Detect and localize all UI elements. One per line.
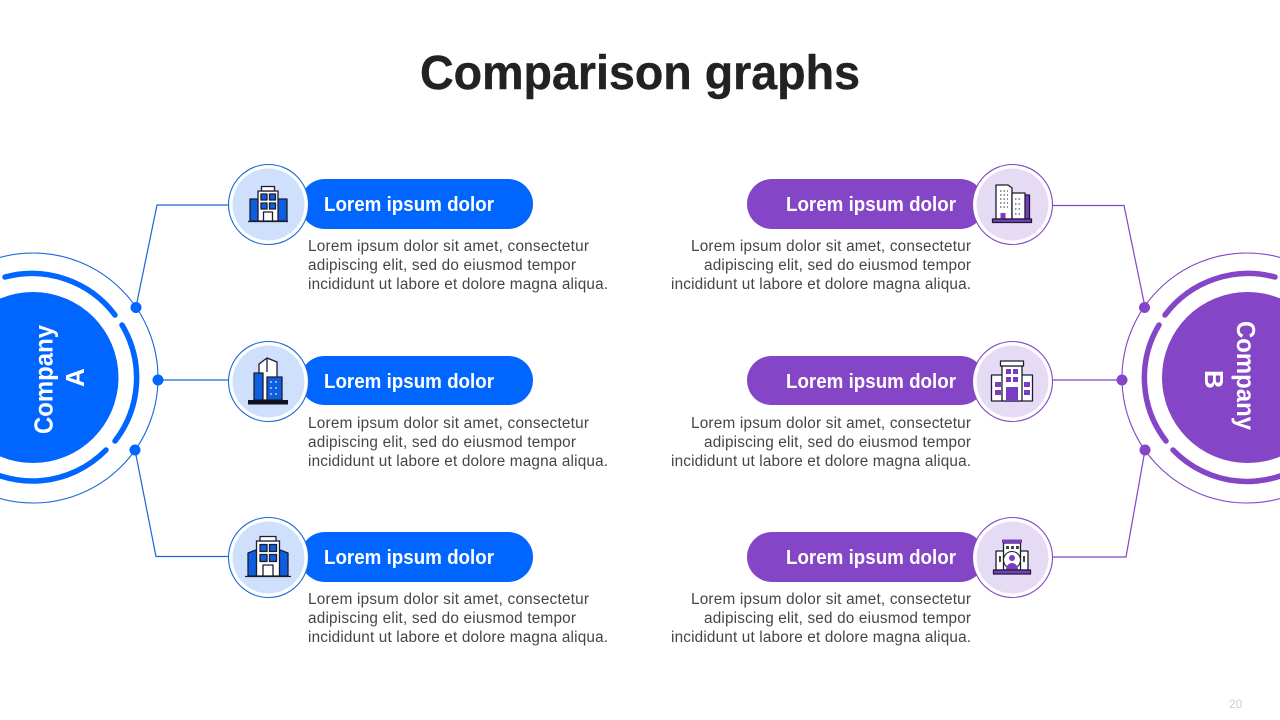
icon: office block B2	[972, 342, 1052, 422]
description A2: Lorem ipsum dolor sit amet, consectetur	[308, 415, 589, 432]
description B1	[671, 238, 971, 293]
row B1	[671, 164, 1052, 293]
description A1: adipiscing elit, sed do eiusmod tempor	[308, 257, 576, 274]
description A1	[308, 238, 608, 293]
description B3	[671, 591, 971, 646]
description B3: incididunt ut labore et dolore magna aliqua.	[671, 629, 971, 646]
description A2: adipiscing elit, sed do eiusmod tempor	[308, 434, 576, 451]
icon: office building A1	[228, 164, 308, 244]
description A1: incididunt ut labore et dolore magna aliqua.	[308, 276, 608, 293]
title: Comparison graphs	[420, 47, 860, 100]
description B2: incididunt ut labore et dolore magna aliqua.	[671, 453, 971, 470]
description A3: adipiscing elit, sed do eiusmod tempor	[308, 610, 576, 627]
pill A3: Lorem ipsum dolor	[324, 547, 494, 569]
icon: towers A2	[228, 342, 308, 422]
description B3: Lorem ipsum dolor sit amet, consectetur	[691, 591, 971, 608]
connector lines A	[135, 205, 230, 556]
description A3	[308, 591, 608, 646]
pill B3	[747, 532, 985, 582]
connector lines B	[1052, 206, 1145, 557]
description A3: Lorem ipsum dolor sit amet, consectetur	[308, 591, 589, 608]
icon: towers B1	[972, 164, 1052, 244]
panel: company A	[0, 205, 230, 556]
pill A1	[300, 179, 533, 229]
description B1: Lorem ipsum dolor sit amet, consectetur	[691, 238, 971, 255]
description A3: incididunt ut labore et dolore magna aliqua.	[308, 629, 608, 646]
company B badge: Company	[1231, 321, 1261, 430]
pill A2	[300, 356, 533, 405]
page number: 20	[1229, 697, 1243, 711]
pill B1	[747, 179, 985, 229]
description B2	[671, 415, 971, 470]
description B2: Lorem ipsum dolor sit amet, consectetur	[691, 415, 971, 432]
pill A2: Lorem ipsum dolor	[324, 371, 494, 393]
row A3	[228, 518, 608, 646]
icon: office building A3	[228, 518, 308, 598]
pill B1: Lorem ipsum dolor	[786, 194, 956, 216]
description A2: incididunt ut labore et dolore magna aliqua.	[308, 453, 608, 470]
description A1: Lorem ipsum dolor sit amet, consectetur	[308, 238, 589, 255]
company A badge: Company	[28, 325, 58, 434]
company A badge	[0, 253, 164, 503]
pill A3	[300, 532, 533, 582]
row A2	[228, 342, 608, 470]
row B3	[671, 518, 1052, 646]
company B badge	[1116, 253, 1280, 503]
description B3: adipiscing elit, sed do eiusmod tempor	[704, 610, 971, 627]
description B2: adipiscing elit, sed do eiusmod tempor	[704, 434, 971, 451]
row A1	[228, 164, 608, 293]
description B1: adipiscing elit, sed do eiusmod tempor	[704, 257, 971, 274]
company B badge: B	[1199, 370, 1229, 389]
pill B2: Lorem ipsum dolor	[786, 371, 956, 393]
pill B3: Lorem ipsum dolor	[786, 547, 956, 569]
row B2	[671, 342, 1052, 470]
pill B2	[747, 356, 985, 405]
pill A1: Lorem ipsum dolor	[324, 194, 494, 216]
icon: building with person B3	[972, 518, 1052, 598]
company A badge: A	[60, 368, 90, 387]
description A2	[308, 415, 608, 470]
description B1: incididunt ut labore et dolore magna aliqua.	[671, 276, 971, 293]
panel: company B	[1052, 206, 1280, 557]
